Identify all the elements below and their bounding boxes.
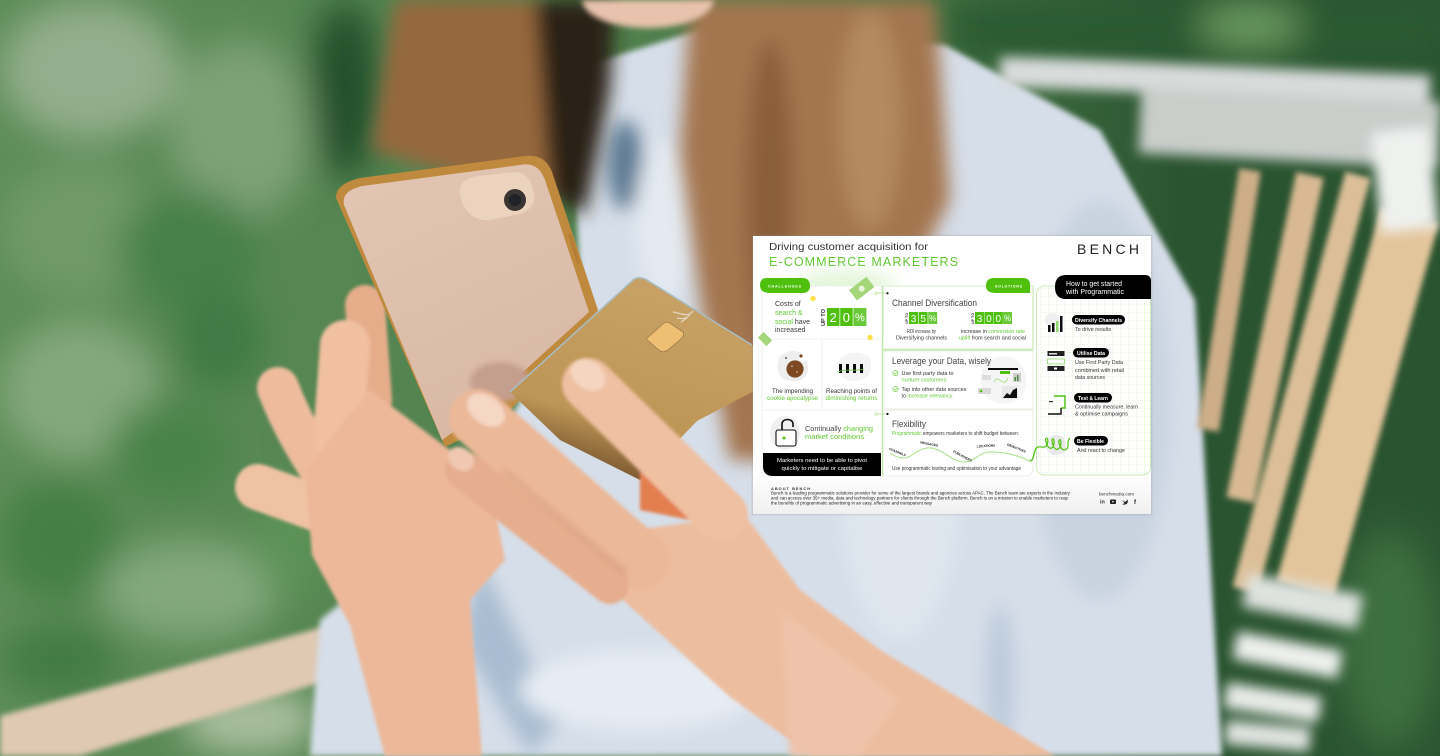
flexibility caption: Use programmatic testing and optimisation to your advantage	[892, 466, 1021, 472]
title: E-COMMERCE MARKETERS	[769, 255, 958, 269]
costs text: social have	[775, 319, 810, 326]
market conditions text: market conditions	[805, 434, 865, 441]
stat: 300%: 3	[977, 314, 983, 325]
BENCH logo: BENCH	[1077, 241, 1139, 257]
step: diversify channels: To drive results	[1075, 327, 1111, 333]
up to 20% stat: 0	[843, 310, 850, 325]
diminishing returns text: diminishing returns	[826, 396, 878, 402]
icon: banknote left	[758, 332, 772, 346]
stat: 300%	[971, 312, 1012, 325]
up to 20% stat: %	[855, 312, 865, 324]
cookie text	[767, 389, 819, 402]
check list	[893, 370, 967, 400]
heading band: with Programmatic	[1065, 289, 1124, 296]
pill: challenges	[760, 278, 810, 293]
heading: flexibility: Flexibility	[892, 419, 926, 430]
costs text: increased	[775, 327, 805, 334]
dark green top right and behind the chair	[950, 0, 1440, 750]
icon: diminishing returns bars	[838, 353, 871, 381]
about bench: Bench is a leading programmatic solutions provider for some of the largest brands and agencies across APAC. The Bench team are experts in the Industry	[771, 490, 1071, 496]
stat: 35%	[905, 312, 937, 325]
heading band	[1055, 275, 1151, 299]
market conditions text: Continually changing	[805, 426, 873, 433]
chin	[582, 0, 714, 28]
check list: to increase relevancy	[902, 394, 953, 400]
about bench: and can access over 35+ media, data and technology partners for clients through the Bench platform. Bench is on a mission to enable marketers to reap	[771, 496, 1069, 500]
diminishing returns text	[826, 389, 878, 402]
stat text: conversion: increase in conversion rate	[961, 329, 1025, 335]
chart: wave with budget labels: PUBLISHERS	[952, 450, 972, 463]
bench website and social links: f	[1134, 500, 1137, 506]
step: utilise data: combined with retail	[1075, 368, 1124, 374]
right hand	[443, 353, 1055, 756]
step: utilise data: Utilise Data	[1077, 351, 1106, 357]
step: utilise data	[1073, 348, 1124, 381]
costs text: Costs of	[775, 301, 801, 308]
step: diversify channels	[1072, 315, 1125, 333]
bench website and social links: benchmedia.com	[1099, 492, 1134, 496]
panel: solutions	[875, 278, 1038, 476]
heading band: How to get started	[1066, 281, 1122, 288]
about bench: the benefits of programmatic advertising in an easy, effective and transparent way	[771, 500, 933, 506]
pill: solutions: SOLUTIONS	[995, 284, 1023, 288]
stat text: conversion	[959, 329, 1026, 342]
icon: bitten cookie	[778, 351, 808, 381]
step: test and learn: & optimise campaigns	[1075, 412, 1128, 418]
about bench: ABOUT BENCH	[771, 486, 810, 491]
cookie text: The impending	[772, 389, 813, 395]
heading: channel diversification: Channel Diversification	[892, 298, 977, 309]
chart: wave with budget labels: CHANNELS	[888, 447, 906, 457]
pill: solutions	[986, 278, 1030, 293]
stat: 300%: 0	[986, 314, 992, 325]
step: test and learn: Continually measure, learn	[1075, 404, 1138, 410]
check list: nurture customers	[902, 378, 947, 384]
stat: 35%: %	[929, 314, 936, 323]
title: Driving customer acquisition for	[769, 241, 929, 253]
phone	[336, 156, 598, 447]
stat: 300%: UP TO	[971, 313, 975, 324]
foliage on the left	[0, 0, 380, 755]
stat: 35%: UP TO	[905, 313, 909, 324]
about bench	[771, 486, 1071, 506]
step: diversify channels: Diversify Channels	[1075, 318, 1122, 324]
icon: yellow dot bottom	[867, 335, 873, 340]
bank card	[510, 278, 756, 480]
step: test and learn	[1074, 393, 1138, 418]
hair	[372, 0, 950, 460]
panel: challenges	[758, 277, 882, 476]
icon: banknote top	[849, 277, 874, 301]
callout: pivot band: Marketers need to be able to pivot	[777, 458, 867, 464]
icon: bars	[1045, 313, 1062, 332]
flexibility text: Programmatic empowers marketers to shift budget between:	[892, 431, 1019, 437]
chart: wave with budget labels	[888, 440, 1038, 463]
stat: 35%: 3	[911, 314, 917, 325]
connector bottom	[875, 413, 889, 415]
stat text: ROI: ROI increase by	[907, 329, 936, 335]
up to 20% stat: UP TO	[821, 308, 827, 326]
stat text: ROI	[896, 329, 947, 342]
bench rail at bottom left	[0, 625, 345, 756]
check list: Tap into other data sources	[902, 387, 967, 393]
costs text: search &	[775, 310, 803, 317]
icon: open padlock	[770, 416, 800, 450]
chart: wave with budget labels: OBJECTIVES	[1006, 442, 1026, 454]
icon: flexible spiral	[1030, 435, 1070, 461]
infographic sheet	[752, 234, 1152, 516]
step: be flexible	[1074, 436, 1125, 454]
icon: test and learn frames	[1048, 396, 1065, 414]
bench website and social links: in	[1100, 500, 1105, 506]
step: be flexible: Be Flexible	[1077, 439, 1104, 445]
step: test and learn: Test & Learn	[1078, 396, 1108, 402]
icon: yellow dot top	[810, 296, 816, 301]
step: utilise data: data sources	[1075, 375, 1105, 381]
heading: leverage your data: Leverage your Data, wisely	[892, 356, 991, 367]
card chip	[646, 322, 684, 352]
stat text: ROI: Diversifying channels	[896, 336, 947, 342]
chart: wave with budget labels: MESSAGES	[920, 440, 938, 448]
icon: data dashboard	[978, 357, 1026, 404]
callout: pivot band: quickly to mitigate or capitalise	[782, 466, 862, 472]
green glow behind panels	[795, 271, 895, 299]
up to 20% stat	[821, 308, 866, 326]
stat text: conversion: uplift from search and social	[959, 336, 1026, 342]
left hand	[258, 305, 505, 756]
up to 20% stat: 2	[830, 310, 837, 325]
icon: data rows	[1048, 351, 1064, 371]
shirt	[310, 30, 1222, 756]
cookie text: cookie apocalypse	[767, 396, 819, 402]
pill: challenges: CHALLENGES	[768, 284, 802, 288]
callout: pivot band	[763, 453, 881, 476]
step: utilise data: Use First Party Data	[1075, 360, 1123, 366]
check list: Use first party data to	[902, 371, 954, 377]
title	[769, 241, 958, 269]
diminishing returns text: Reaching points of	[826, 389, 877, 395]
stat: 300%: %	[1004, 314, 1011, 323]
panel: how to get started	[1030, 275, 1151, 475]
connector top	[875, 292, 889, 295]
wooden chair slats	[1000, 72, 1440, 740]
step: be flexible: And react to change	[1077, 448, 1125, 454]
stat: 35%: 5	[920, 314, 926, 325]
stat: 300%: 0	[996, 314, 1002, 325]
bench website and social links	[1099, 492, 1137, 506]
market conditions text	[805, 426, 873, 441]
chart: wave with budget labels: LOCATIONS	[977, 443, 995, 449]
